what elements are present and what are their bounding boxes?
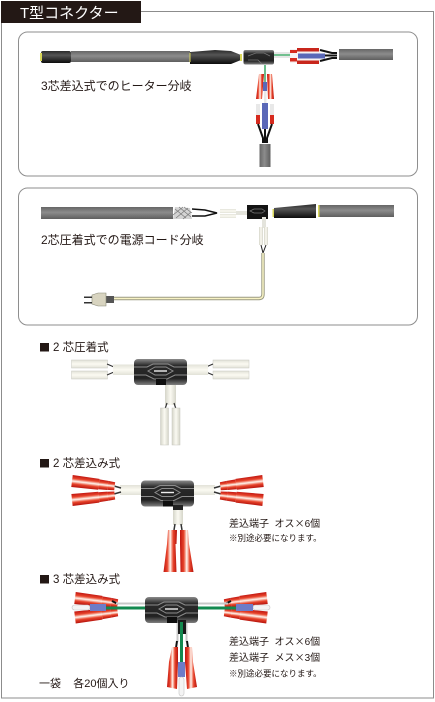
right terminals [198,592,270,623]
power cord and plug [84,253,263,306]
left terminals [72,592,145,623]
title: T型コネクター [20,5,119,22]
panel: 2-core power cord branch [18,188,418,325]
heading: 3 芯差込み式 [53,573,121,586]
T connector [244,50,274,64]
panel: 3-core heater branch [18,32,418,176]
vertical terminal [259,217,268,253]
section: 2-core plug-in [40,457,322,572]
left terminals [72,360,134,379]
caption: 2芯圧着式での電源コード分岐 [41,232,204,247]
connector [141,480,194,506]
lower terminals [167,620,197,696]
title [1,1,141,23]
left cable [41,207,247,219]
section: 2-core crimp [40,340,249,445]
note: 差込端子 オス×6個 [229,515,320,530]
heading: 2 芯圧着式 [53,340,109,354]
note: 差込端子 メス×3個 [229,649,320,664]
note: ※別途必要になります。 [229,668,322,678]
right terminals [194,475,264,506]
left heater cable [40,50,242,64]
heading [40,340,109,354]
note [229,633,322,678]
note: 差込端子 オス×6個 [229,633,320,648]
lower branch [256,65,274,167]
left terminals [71,475,141,506]
quantity note: 一袋 各20個入り [39,676,129,690]
note: ※別途必要になります。 [229,533,322,543]
right terminals [187,360,249,379]
lower terminals [160,385,180,445]
caption: 3芯差込式でのヒーター分岐 [41,79,192,93]
connector [145,597,198,623]
lower terminals [164,505,194,572]
note [229,515,322,543]
connector [134,359,187,385]
right terminals and cable [274,48,393,64]
T connector [247,205,268,219]
heading: 2 芯差込み式 [53,457,121,470]
right cable [272,204,394,218]
section: 3-core plug-in [40,573,322,696]
